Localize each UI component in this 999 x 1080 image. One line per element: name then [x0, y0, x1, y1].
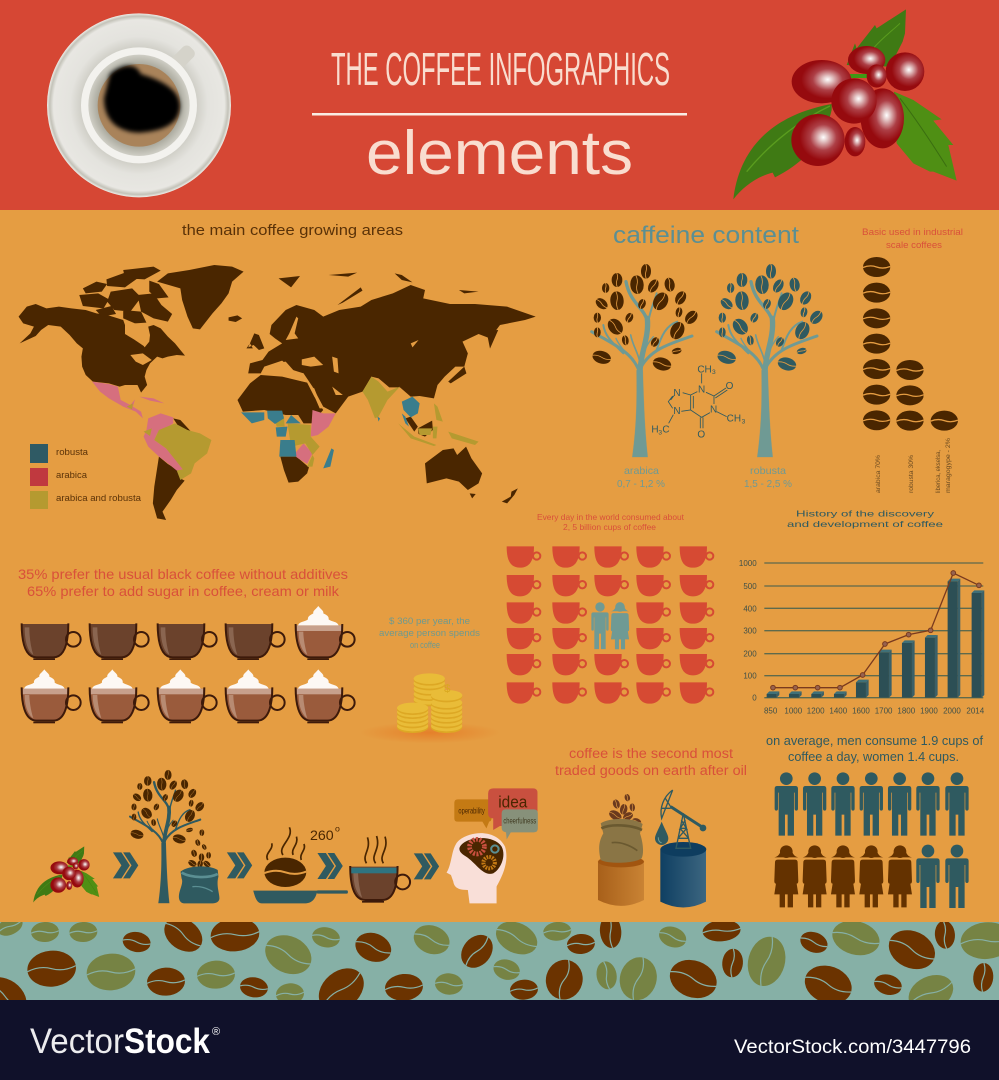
- text: roast temperature: 260: [310, 827, 334, 843]
- caffeine molecule: O: [726, 381, 734, 392]
- chart: history bars and line: 200: [743, 650, 757, 659]
- chart: history bars and line: 1000: [784, 707, 803, 716]
- label: arabica caffeine: [617, 465, 665, 490]
- heading: industrial coffees: Basic used in industrial: [862, 227, 963, 238]
- caffeine molecule: 3: [742, 418, 746, 425]
- labels: bean stacks: liberica, ekselsa,: [935, 450, 942, 493]
- caffeine molecule: [651, 364, 746, 440]
- icon: coffee berries: [733, 9, 957, 199]
- caffeine molecule: O: [697, 429, 705, 440]
- arrow 3: [317, 853, 343, 879]
- heading: cups per day: 2, 5 billion cups of coffee: [563, 522, 656, 532]
- speech bubbles: cheerfulness: [503, 816, 536, 825]
- heading: cups by gender: [766, 733, 983, 764]
- caffeine molecule: 3: [712, 369, 716, 376]
- chart: history bars and line: 400: [743, 604, 757, 613]
- speech bubbles: [454, 788, 538, 839]
- chart: history bars and line: 300: [743, 627, 757, 636]
- caffeine molecule: 3: [658, 429, 662, 436]
- caffeine molecule: N: [710, 405, 717, 416]
- world map: [19, 265, 536, 520]
- text: yearly spend: $ 360 per year, the: [389, 616, 470, 626]
- chart: history bars and line: 100: [743, 672, 757, 681]
- chart: history bars and line: 1800: [897, 707, 916, 716]
- pictogram: red cups with people: [507, 546, 713, 704]
- arrow 2: [227, 852, 252, 878]
- legend: arabica: [56, 470, 87, 480]
- chart: history bars and line: 0: [752, 694, 757, 703]
- speech bubbles: idea: [498, 792, 528, 811]
- heading: cups by gender: on average, men consume 1.9 cups of: [766, 733, 983, 748]
- icon: head with gears: [447, 833, 506, 903]
- icon: coffee cup on saucer: [47, 13, 231, 197]
- chart: history bars and line: 1200: [807, 707, 825, 716]
- pictogram: coffee cups: [22, 606, 355, 723]
- icon: roasting pan with bean: [253, 827, 348, 903]
- heading: growing areas: the main coffee growing areas: [182, 223, 403, 239]
- text: roast temperature: [310, 824, 340, 843]
- heading: traded goods: traded goods on earth after oil: [555, 763, 747, 778]
- label: arabica caffeine: 0,7 - 1,2 %: [617, 478, 665, 490]
- text: yearly spend: [379, 616, 481, 650]
- heading: caffeine content: caffeine content: [613, 222, 799, 249]
- legend: [30, 444, 141, 509]
- chart: history bars and line: [739, 559, 985, 716]
- label: robusta caffeine: 1,5 - 2,5 %: [744, 478, 792, 490]
- heading: coffee preferences: 65% prefer to add sugar in coffee, cream or milk: [27, 583, 340, 599]
- chart: bean stacks: [863, 257, 958, 431]
- chart: history bars and line: 2014: [966, 707, 985, 716]
- chart: history bars and line: 2000: [943, 707, 961, 716]
- icon: small berries: [33, 846, 99, 903]
- caffeine molecule: N: [673, 388, 681, 399]
- panel: header band: [0, 0, 999, 210]
- footer image id: VectorStock.com/3447796: [734, 1036, 971, 1058]
- chart: history bars and line: 500: [743, 582, 757, 591]
- caffeine molecule: N: [673, 406, 681, 417]
- caffeine molecule: CH: [727, 414, 741, 425]
- footer logo: ®: [212, 1026, 220, 1038]
- footer logo: [30, 1022, 220, 1061]
- heading: cups per day: Every day in the world consumed about: [537, 512, 685, 522]
- text: yearly spend: average person spends: [379, 628, 481, 638]
- legend: robusta: [56, 447, 88, 457]
- text: roast temperature: o: [335, 824, 340, 834]
- text: yearly spend: on coffee: [410, 640, 440, 650]
- icon: coin stacks: $: [444, 683, 451, 695]
- subtitle: elements: [366, 119, 633, 188]
- heading: coffee preferences: [18, 566, 348, 599]
- speech bubbles: operability: [458, 806, 485, 815]
- heading: coffee preferences: 35% prefer the usual black coffee without additives: [18, 566, 348, 582]
- label: arabica caffeine: arabica: [624, 465, 659, 477]
- icon: steaming cup: [350, 836, 410, 903]
- heading: cups by gender: coffee a day, women 1.4 cups.: [788, 749, 959, 764]
- icon: small tree: [130, 770, 206, 903]
- heading: industrial coffees: [862, 227, 963, 251]
- label: robusta caffeine: [744, 465, 792, 490]
- heading: traded goods: coffee is the second most: [569, 746, 733, 761]
- caffeine molecule: N: [698, 384, 705, 395]
- chart: history bars and line: 850: [764, 707, 778, 716]
- chart: history bars and line: 1900: [920, 707, 938, 716]
- chart heading: History of the discovery: [796, 508, 935, 518]
- heading: industrial coffees: scale coffees: [886, 240, 942, 251]
- labels: bean stacks: arabica 70%: [875, 455, 882, 493]
- heading: cups per day: [537, 512, 685, 532]
- process: berries to brain: [33, 770, 538, 903]
- arrow 1: [113, 852, 138, 878]
- labels: bean stacks: robusta 30%: [908, 455, 915, 493]
- chart: history bars and line: 1000: [739, 559, 757, 568]
- chart: history bars and line: 1700: [875, 707, 893, 716]
- chart: history bars and line: 1600: [852, 707, 870, 716]
- footer band: [0, 1000, 999, 1080]
- icon: robusta tree: [716, 264, 825, 457]
- caffeine molecule: C: [662, 425, 670, 436]
- chart: history bars and line: 1400: [829, 707, 848, 716]
- title: THE COFFEE INFOGRAPHICS: [331, 43, 670, 95]
- caffeine molecule: CH: [697, 364, 712, 375]
- footer logo: Stock: [124, 1022, 210, 1061]
- icon: coin stacks: [360, 673, 500, 743]
- arrow 4: [414, 853, 439, 879]
- labels: bean stacks: maragogype - 2%: [945, 438, 952, 493]
- pictogram: men and women: [774, 772, 969, 908]
- icon: arabica tree: [591, 264, 700, 457]
- chart heading: and development of coffee: [787, 519, 943, 529]
- legend: arabica and robusta: [56, 493, 141, 503]
- icon: coffee sack and oil barrel: [598, 790, 706, 907]
- bean pattern band: [0, 922, 999, 1000]
- heading: traded goods: [555, 746, 747, 778]
- label: robusta caffeine: robusta: [750, 465, 786, 477]
- labels: bean stacks: [875, 438, 952, 493]
- icon: sack of beans: [179, 829, 219, 903]
- footer logo: Vector: [30, 1022, 124, 1061]
- caffeine molecule: H: [651, 425, 659, 436]
- chart heading: [787, 508, 943, 529]
